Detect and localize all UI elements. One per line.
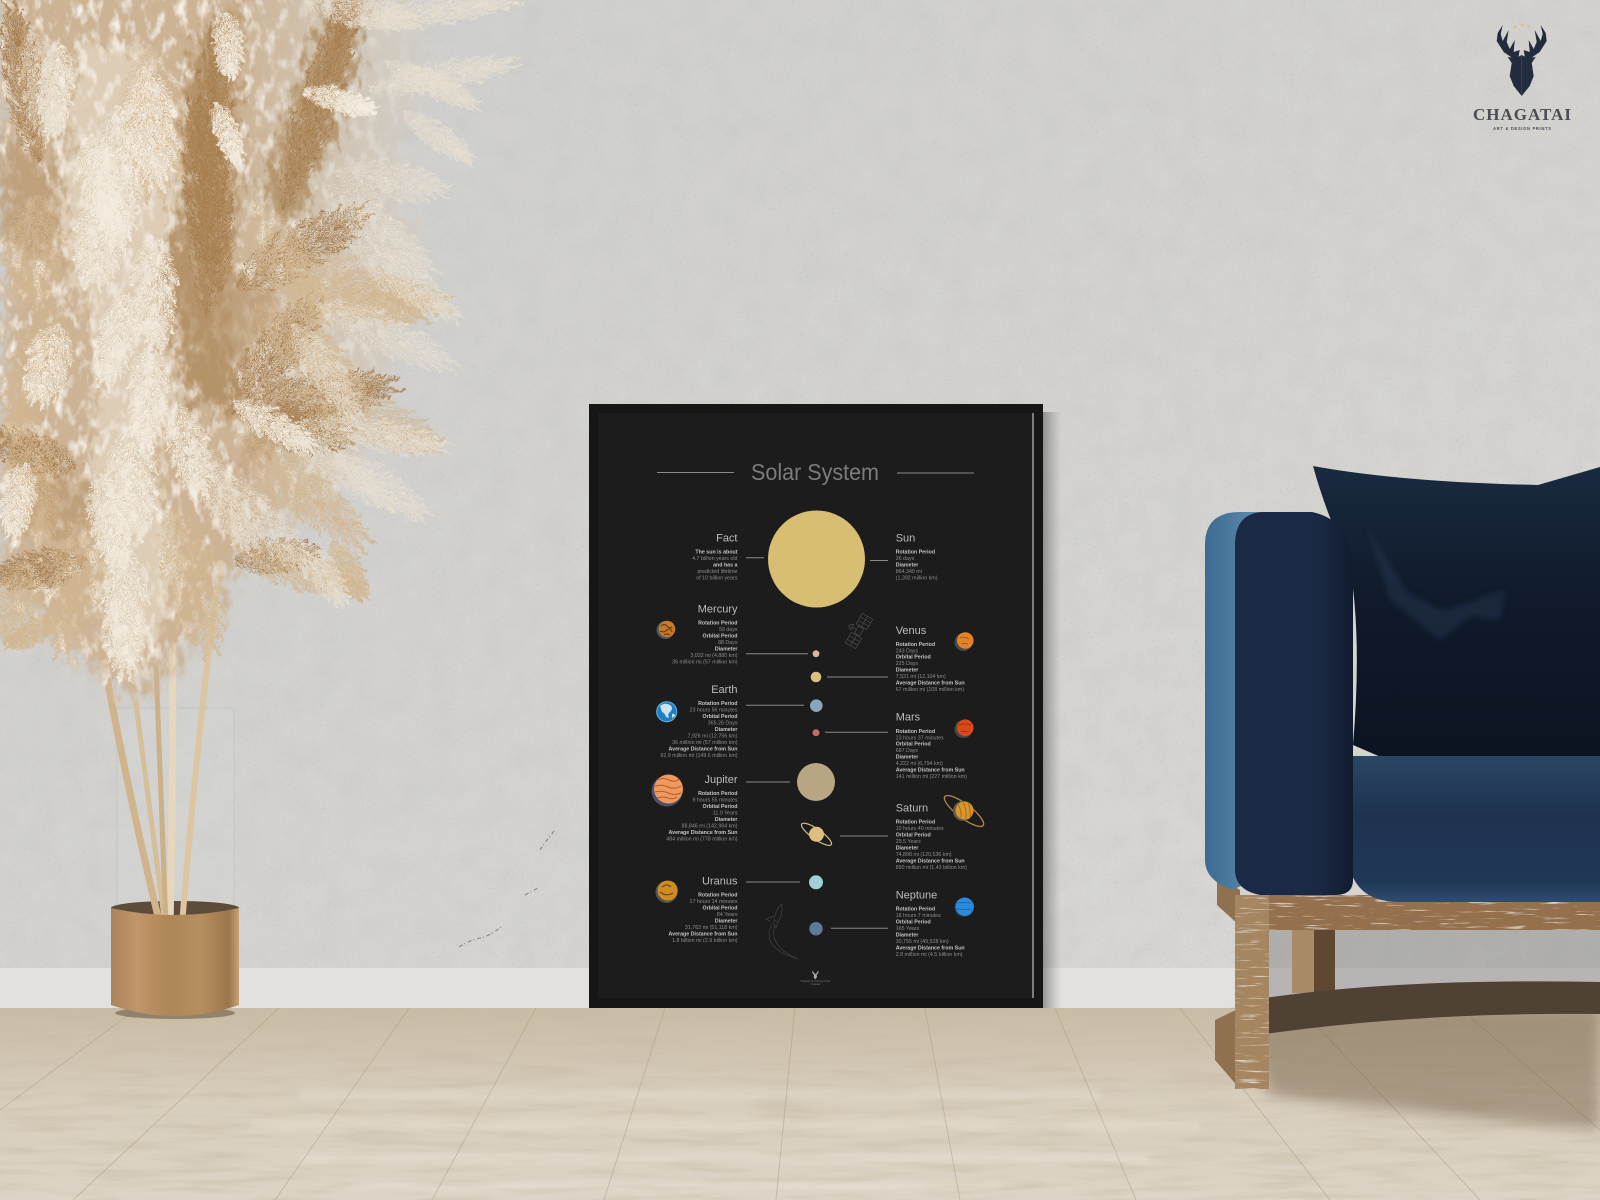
icon: venus [954, 632, 974, 651]
jupiter: 88,846 mi (142,984 km) [682, 823, 738, 829]
venus: 225 Days [896, 661, 918, 667]
sofa: back leg [1292, 925, 1335, 993]
satellite [841, 611, 873, 649]
jupiter: Orbital Period [702, 804, 738, 810]
sofa: seat cushion [1348, 756, 1600, 902]
poster frame [589, 404, 1043, 1008]
title: Solar System [751, 459, 879, 485]
poster background [598, 413, 1033, 998]
sun disc [768, 510, 865, 608]
framed poster [589, 404, 1043, 1008]
rocket with trail [766, 904, 798, 959]
saturn: Orbital Period [896, 832, 931, 838]
neptune: 165 Years [896, 926, 920, 932]
sofa: side rail and foot [1215, 876, 1240, 1089]
neptune: 30,755 mi (49,528 km) [896, 939, 949, 945]
mercury [656, 604, 819, 665]
plant: wispy outer sprays [4, 0, 528, 620]
plant: cream fronds [0, 8, 385, 686]
neptune: Neptune [896, 889, 937, 901]
skirting board [0, 968, 1600, 1008]
venus: 7,521 mi (12,104 km) [896, 674, 946, 680]
uranus: 84 Years [717, 912, 738, 918]
sun text: (1,392 million km) [896, 575, 938, 581]
venus: 243 Days [896, 648, 918, 654]
sofa: front leg [1235, 895, 1269, 1089]
plant: tan fronds [0, 38, 459, 670]
earth: 36 million mi (57 million km) [672, 740, 738, 746]
plant: plume mass [0, 0, 430, 700]
earth: 23 hours 56 minutes [690, 708, 738, 714]
mercury: 36 million mi (57 million km) [672, 659, 738, 665]
mars: 141 million mi (227 million km) [896, 774, 967, 780]
saturn: Average Distance from Sun [896, 858, 965, 864]
earth: Rotation Period [698, 701, 738, 707]
saturn: Rotation Period [896, 820, 935, 826]
jupiter: Average Distance from Sun [669, 830, 738, 836]
mercury: Mercury [698, 604, 738, 616]
saturn: 74,898 mi (120,536 km) [896, 852, 952, 858]
uranus: Rotation Period [698, 892, 738, 898]
uranus: 1.8 billion mi (2.9 billion km) [672, 938, 738, 944]
earth: Average Distance from Sun [669, 746, 738, 752]
brand logo [1473, 24, 1571, 131]
jupiter: 11.9 Years [713, 811, 738, 817]
earth: 92.9 million mi (149.6 million km) [660, 753, 738, 759]
fact text: and has a [713, 562, 738, 568]
jupiter: Jupiter [704, 774, 738, 786]
mercury: 88 Days [718, 640, 738, 646]
mars: Diameter [896, 755, 918, 761]
earth: Earth [711, 684, 738, 696]
mars: 4,222 mi (6,794 km) [896, 761, 943, 767]
mercury: Rotation Period [698, 620, 738, 626]
mercury: 3,032 mi (4,880 km) [690, 653, 738, 659]
venus: Average Distance from Sun [896, 681, 965, 687]
venus: 67 million mi (108 million km) [896, 687, 964, 693]
sofa: pillow [1313, 466, 1600, 761]
sofa: curved rail [1265, 981, 1600, 1034]
icon: deer head [1497, 25, 1547, 96]
earth: 365.26 Days [708, 721, 738, 727]
plant: dark fronds [0, 0, 410, 604]
small poster logo: Chagatai Art & Design Prints [800, 980, 831, 983]
icon: uranus [656, 880, 678, 903]
icon: saturn [941, 791, 987, 831]
poster shadow [1043, 412, 1061, 1008]
neptune: 2.8 million mi (4.5 billion km) [896, 952, 963, 958]
fact text: predicted lifetime [697, 569, 738, 575]
neptune: Rotation Period [896, 906, 935, 912]
neptune [809, 889, 974, 958]
mercury: Diameter [715, 646, 738, 652]
sofa [1205, 466, 1600, 1130]
saturn: Saturn [896, 802, 928, 814]
icon: mercury [656, 621, 675, 639]
fact text: The sun is about [695, 550, 738, 556]
venus [811, 625, 974, 693]
mars: 23 hours 37 minutes [896, 735, 944, 741]
mars: Average Distance from Sun [896, 768, 965, 774]
neptune: Average Distance from Sun [896, 945, 965, 951]
saturn: Diameter [896, 845, 918, 851]
neptune: 16 hours 7 minutes [896, 913, 941, 919]
jupiter: Rotation Period [698, 791, 738, 797]
venus: Rotation Period [896, 642, 935, 648]
small poster logo: Chagatai [811, 983, 821, 986]
earth: 7,926 mi (12,756 km) [687, 733, 738, 739]
plant: stems [100, 522, 226, 925]
sun text: Sun [896, 532, 915, 544]
plant: gold planter [111, 908, 239, 1019]
venus: Venus [896, 625, 927, 637]
fact text: of 10 billion years [696, 575, 738, 581]
mars: 687 Days [896, 748, 918, 754]
uranus [656, 875, 823, 944]
sofa: floor shadow [1240, 1008, 1600, 1130]
sofa: wall shadow [1269, 930, 1600, 1008]
uranus: Average Distance from Sun [669, 931, 738, 937]
brand name: CHAGATAI [1473, 105, 1571, 124]
fact text [692, 532, 764, 581]
mars: Rotation Period [896, 729, 935, 735]
uranus: Diameter [715, 918, 738, 924]
sofa: arm front [1235, 512, 1353, 895]
mercury: Orbital Period [702, 633, 738, 639]
earth: Diameter [715, 727, 738, 733]
icon: jupiter [652, 774, 683, 806]
sun text: 864,340 mi [896, 569, 922, 575]
sofa: arm side [1205, 512, 1300, 890]
uranus: Uranus [702, 876, 738, 888]
uranus: Orbital Period [702, 905, 738, 911]
mars: Orbital Period [896, 742, 931, 748]
saturn [799, 791, 987, 871]
saturn: 10 hours 40 minutes [896, 826, 944, 832]
mars: Mars [896, 712, 921, 724]
wooden floor [0, 1008, 1600, 1200]
saturn: 29.5 Years [896, 839, 921, 845]
neptune: Diameter [896, 932, 918, 938]
sun text [870, 532, 938, 581]
fact text: Fact [716, 532, 738, 544]
uranus: 31,763 mi (51,118 km) [685, 925, 738, 931]
plant: glass vase [112, 708, 234, 910]
sofa: pillow sheen [1367, 527, 1505, 640]
icon: mars [954, 719, 974, 738]
jupiter: Diameter [715, 817, 738, 823]
mars [812, 712, 974, 780]
fact text: 4.7 billion years old [692, 556, 738, 562]
brand tagline: ART & DESIGN PRINTS [1493, 126, 1551, 131]
mercury: 59 days [719, 627, 738, 633]
sun text: Diameter [896, 562, 918, 568]
icon: earth [656, 701, 677, 722]
earth [656, 684, 823, 759]
uranus: 17 hours 14 minutes [690, 899, 738, 905]
icon: neptune [954, 898, 974, 917]
earth: Orbital Period [702, 714, 738, 720]
saturn: 890 million mi (1.43 billion km) [896, 865, 967, 871]
small poster logo [800, 970, 831, 986]
jupiter: 484 million mi (778 million km) [666, 836, 738, 842]
sofa: horizontal beam [1265, 895, 1600, 930]
jupiter: 9 hours 55 minutes [692, 798, 738, 804]
icon: gold dots [1514, 24, 1530, 28]
sun text: Rotation Period [896, 550, 935, 556]
neptune: Orbital Period [896, 919, 931, 925]
sun text: 26 days [896, 556, 915, 562]
jupiter [652, 763, 835, 842]
venus: Diameter [896, 668, 918, 674]
poster edge highlight [1032, 413, 1034, 998]
plant: pampas grass [0, 0, 528, 1019]
plant: planter back [111, 901, 239, 915]
venus: Orbital Period [896, 655, 931, 661]
